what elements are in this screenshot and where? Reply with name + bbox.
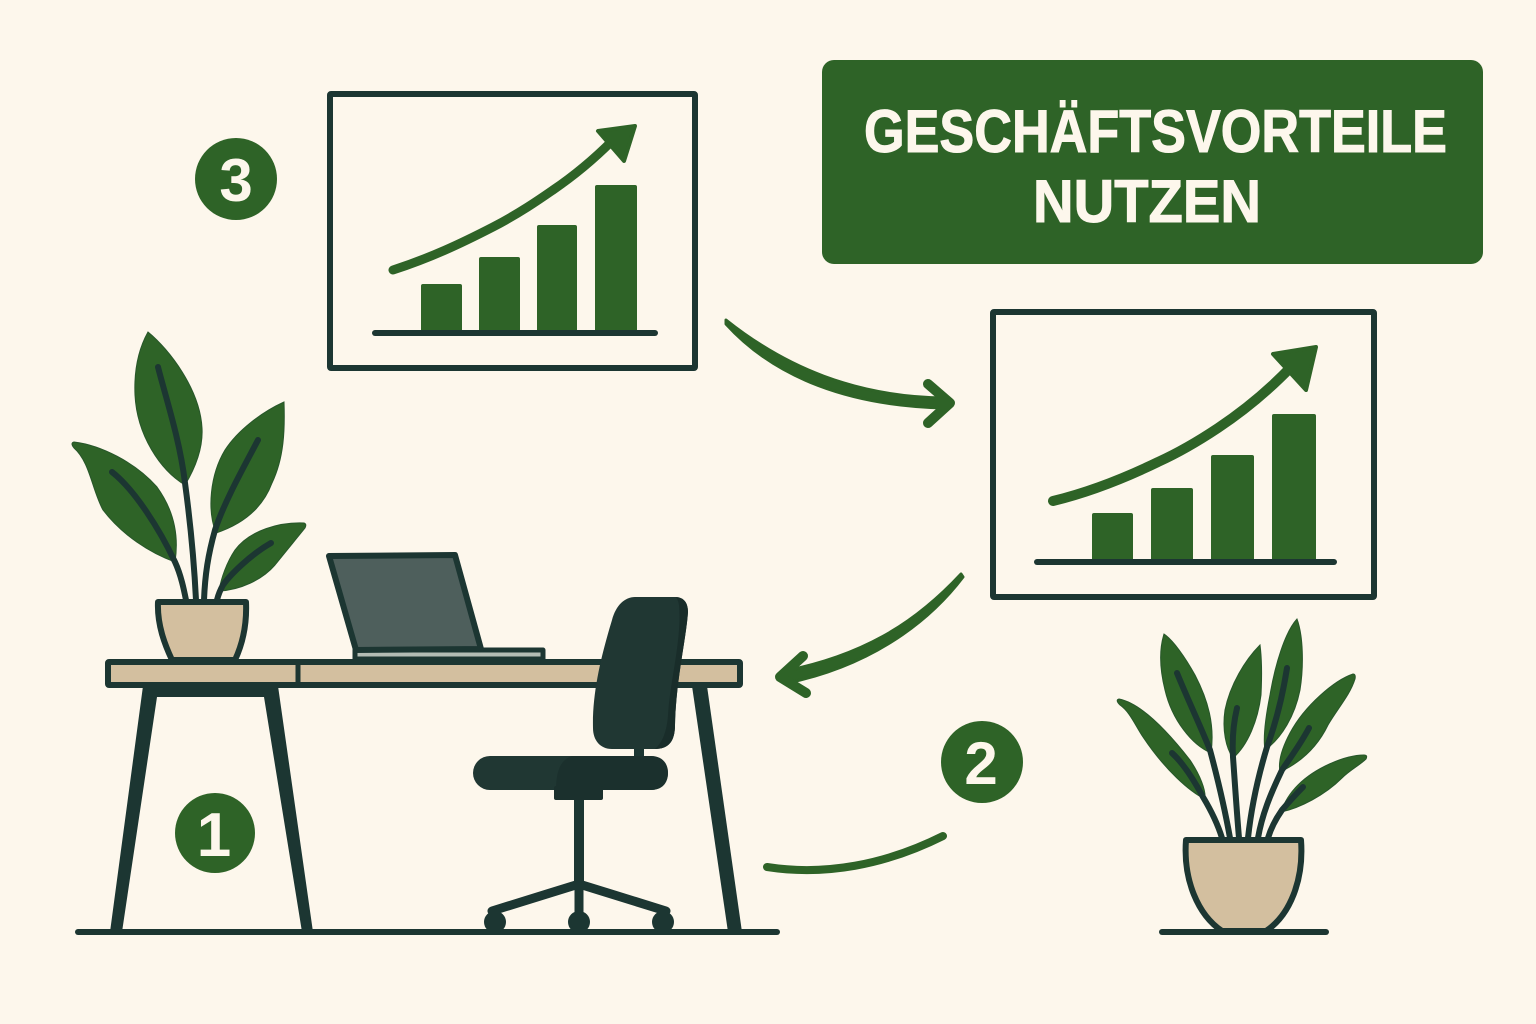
leaves (1117, 619, 1367, 812)
stems (112, 367, 271, 600)
office chair (473, 597, 688, 933)
step badge 3: 3 (219, 147, 253, 214)
chart panel: right (993, 312, 1374, 597)
pot (1186, 840, 1301, 931)
bars (421, 185, 637, 333)
step badge 1 (175, 793, 255, 873)
bars (1092, 414, 1316, 562)
backrest (593, 597, 688, 749)
step badge 3 (195, 138, 277, 220)
step badge 2 (941, 721, 1023, 803)
desk (78, 662, 777, 932)
back support (634, 745, 644, 759)
arrow: curved connector (767, 836, 943, 870)
step badge 2: 2 (964, 730, 998, 797)
title banner: NUTZEN (1033, 168, 1261, 235)
base (484, 800, 674, 933)
arrow: chart to desk (780, 574, 963, 693)
stems (1172, 668, 1309, 838)
title banner (822, 60, 1483, 264)
chart panel: upper left (330, 94, 695, 368)
laptop (329, 555, 543, 659)
step badge 1: 1 (197, 801, 231, 870)
leaves (72, 332, 306, 591)
title banner: GESCHÄFTSVORTEILE (864, 98, 1447, 165)
desk legs (110, 686, 742, 932)
floor line (1162, 929, 1326, 935)
plant on desk (72, 332, 306, 660)
baseline (1037, 559, 1334, 565)
plant in floor pot (1117, 619, 1367, 932)
arrow: chart to chart (726, 320, 950, 423)
desk top (108, 662, 740, 685)
growth arrow (393, 126, 635, 270)
growth arrow (1053, 347, 1316, 501)
seat (473, 756, 668, 790)
pot (158, 602, 246, 660)
floor line (78, 929, 777, 935)
baseline (375, 330, 655, 336)
